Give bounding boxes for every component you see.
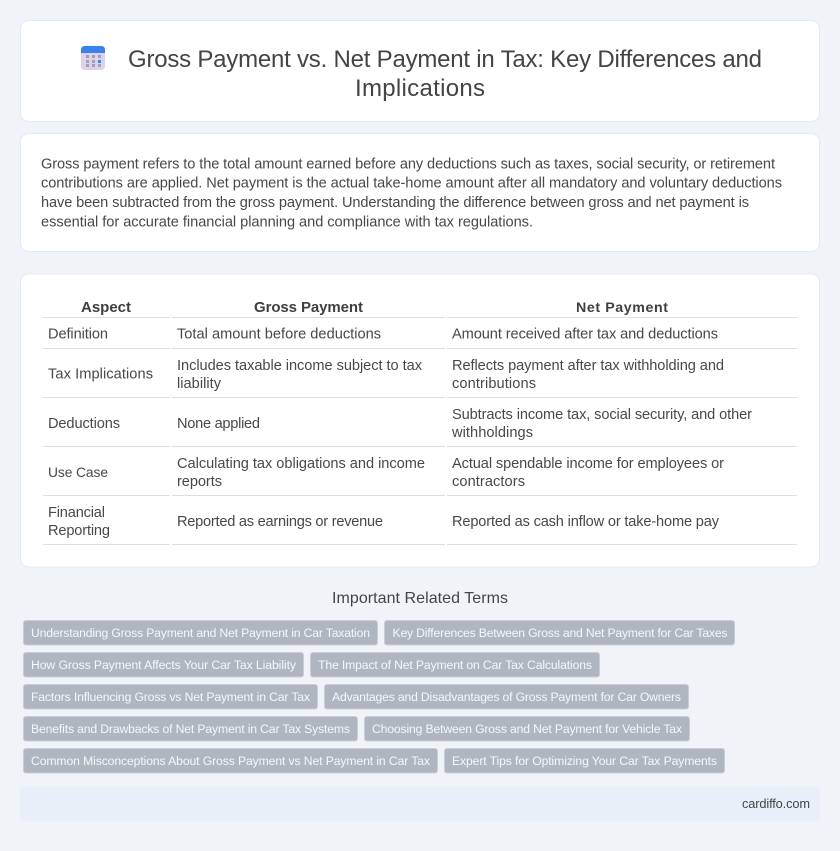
panel: comparison table [20, 274, 820, 567]
panel: introduction [20, 134, 820, 252]
tag row 1: Key Differences Between Gross and Net Payment for Car Taxes [392, 626, 728, 640]
row: definition: Amount received after tax and deductions [452, 326, 718, 342]
row: deductions: Subtracts income tax, social security, and other [452, 407, 752, 423]
tag row 1: Understanding Gross Payment and Net Payment in Car Taxation [31, 626, 370, 640]
title: Implications [355, 75, 485, 102]
tag row 2 [24, 652, 600, 677]
row: definition: Total amount before deductions [177, 326, 381, 342]
row: tax implications: Reflects payment after tax withholding and [452, 358, 724, 374]
row: financial reporting: Reported as earnings or revenue [177, 514, 383, 530]
tag row 3: Advantages and Disadvantages of Gross Payment for Car Owners [332, 690, 681, 704]
heading: related terms: Important Related Terms [332, 590, 508, 607]
row: financial reporting [48, 505, 720, 539]
text block: introduction paragraph: have been subtracted from the gross payment. Understanding the difference between gross and net payment is [41, 195, 749, 211]
tag row 5: Expert Tips for Optimizing Your Car Tax Payments [452, 754, 717, 768]
text block: introduction paragraph: Gross payment refers to the total amount earned before any deductions such as taxes, social security, or retirement [41, 156, 775, 172]
text block: introduction paragraph [41, 156, 782, 230]
row: use case: reports [177, 474, 222, 490]
row: use case: Calculating tax obligations and income [177, 456, 425, 472]
tag row 3: Factors Influencing Gross vs Net Payment in Car Tax [31, 690, 310, 704]
panel: header [20, 20, 820, 122]
row: definition [48, 326, 718, 342]
row: tax implications: liability [177, 376, 222, 392]
footer [20, 787, 820, 821]
row: deductions [48, 407, 752, 441]
tag row 5 [24, 748, 724, 773]
row: deductions: withholdings [451, 425, 533, 441]
row: financial reporting: Reporting [48, 523, 110, 539]
tag row 1 [24, 620, 734, 645]
tag row 2: The Impact of Net Payment on Car Tax Calculations [318, 658, 592, 672]
table header: Gross Payment [254, 299, 363, 316]
text block: introduction paragraph: contributions are applied. Net payment is the actual take-home amount after all mandatory and voluntary deductions [41, 176, 782, 192]
tag row 4: Benefits and Drawbacks of Net Payment in Car Tax Systems [31, 722, 350, 736]
row: tax implications: Includes taxable income subject to tax [177, 358, 423, 374]
row: use case: Use Case [48, 465, 108, 480]
title [128, 46, 762, 102]
row: financial reporting: Reported as cash inflow or take-home pay [452, 514, 720, 530]
row: tax implications: contributions [452, 376, 536, 392]
panel: related term tags [24, 620, 734, 773]
text block: introduction paragraph: essential for accurate financial planning and compliance with tax regulations. [41, 214, 533, 230]
row: definition: Definition [48, 326, 108, 342]
tag row 2: How Gross Payment Affects Your Car Tax Liability [31, 658, 297, 672]
table header: Net Payment [576, 300, 668, 316]
table header [81, 299, 668, 316]
tag row 3 [24, 684, 688, 709]
tag row 5: Common Misconceptions About Gross Payment vs Net Payment in Car Tax [31, 754, 430, 768]
row: use case: contractors [452, 474, 525, 490]
row: tax implications [48, 358, 724, 392]
tag row 4 [24, 716, 690, 741]
row: use case: Actual spendable income for employees or [452, 456, 724, 472]
title: Gross Payment vs. Net Payment in Tax: Key Differences and [128, 46, 762, 73]
table header: Aspect [81, 299, 131, 316]
icon: calendar [81, 46, 105, 70]
row: financial reporting: Financial [48, 505, 105, 521]
row: deductions: Deductions [48, 416, 120, 432]
row: deductions: None applied [177, 416, 260, 432]
footer: cardiffo.com [742, 796, 810, 811]
row: tax implications: Tax Implications [48, 366, 153, 382]
row: use case [48, 456, 724, 490]
tag row 4: Choosing Between Gross and Net Payment for Vehicle Tax [372, 722, 682, 736]
